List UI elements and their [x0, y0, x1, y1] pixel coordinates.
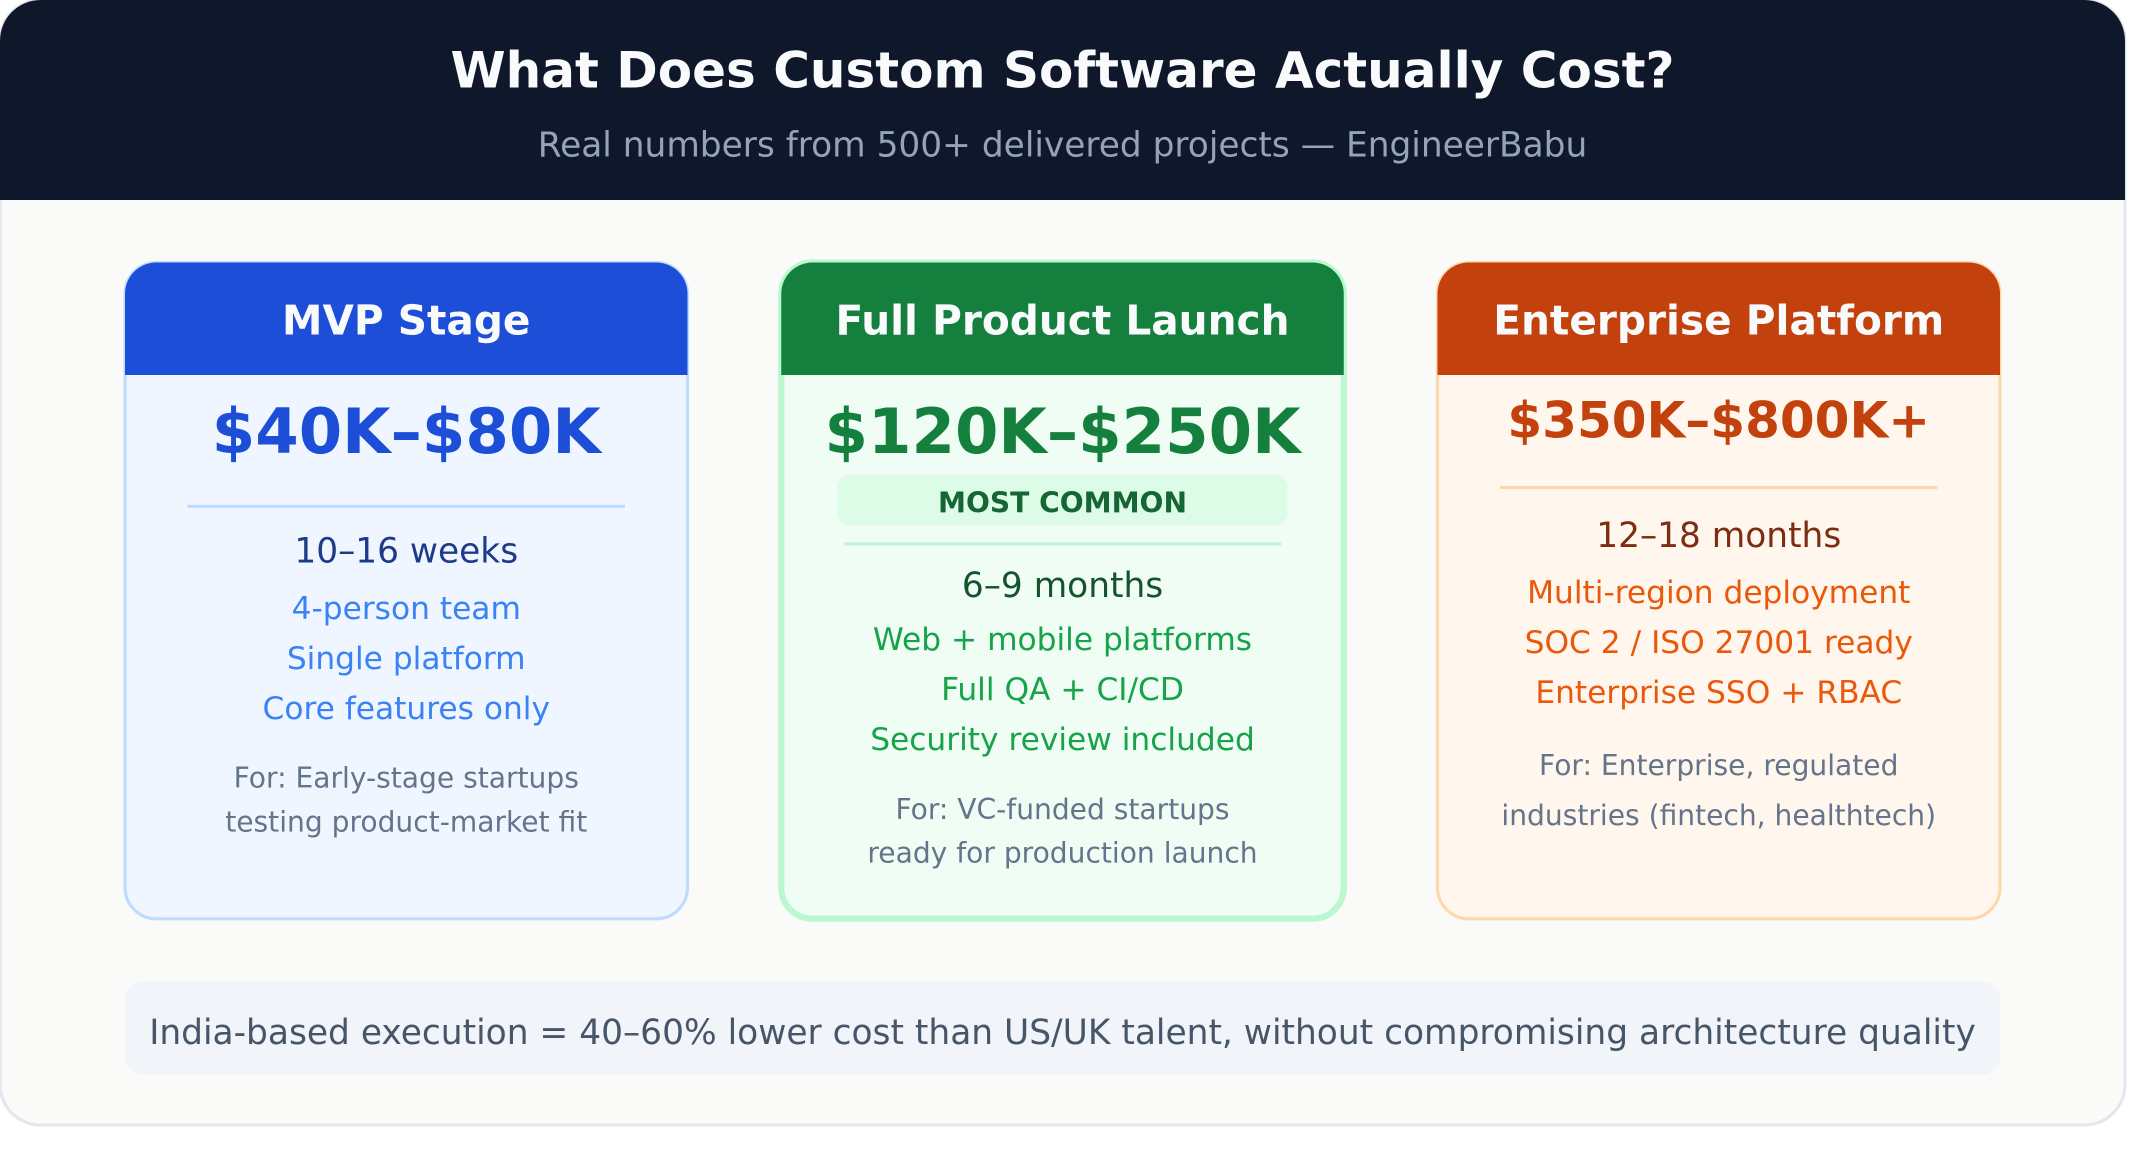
features: enterprise platform	[1525, 575, 1913, 711]
title: What Does Custom Software Actually Cost?	[450, 41, 1675, 99]
features: full product launch	[870, 622, 1255, 758]
audience: MVP stage: For: Early-stage startups	[234, 761, 579, 794]
card header: enterprise platform	[1438, 262, 2000, 375]
footer callout	[125, 981, 2000, 1075]
heading: enterprise platform: Enterprise Platform	[1493, 296, 1944, 344]
features: MVP stage: Single platform	[287, 641, 526, 677]
audience: MVP stage	[225, 761, 587, 838]
features: MVP stage: Core features only	[263, 691, 550, 727]
panel: enterprise platform	[1438, 262, 2000, 919]
card header: MVP stage	[125, 262, 688, 375]
heading: full product launch: Full Product Launch	[836, 296, 1289, 344]
heading: MVP stage: MVP Stage	[282, 296, 530, 344]
timeline: enterprise platform: 12–18 months	[1596, 516, 1841, 556]
header band	[0, 0, 2125, 200]
badge: most common: MOST COMMON	[938, 486, 1187, 519]
features: full product launch: Full QA + CI/CD	[941, 672, 1184, 708]
badge: most common	[838, 475, 1288, 525]
timeline: full product launch: 6–9 months	[962, 566, 1163, 606]
audience: full product launch: For: VC-funded startups	[895, 793, 1230, 826]
price: MVP stage: $40K–$80K	[212, 395, 603, 468]
features: enterprise platform: SOC 2 / ISO 27001 ready	[1525, 625, 1913, 661]
audience: enterprise platform: industries (fintech, healthtech)	[1501, 799, 1936, 832]
audience: full product launch: ready for production launch	[867, 836, 1258, 869]
panel: MVP stage	[125, 262, 688, 919]
subtitle: Real numbers from 500+ delivered projects — EngineerBabu	[538, 125, 1587, 165]
features: full product launch: Web + mobile platforms	[873, 622, 1252, 658]
timeline: MVP stage: 10–16 weeks	[294, 531, 518, 571]
card header: full product launch	[781, 262, 1344, 375]
audience: enterprise platform: For: Enterprise, regulated	[1539, 749, 1898, 782]
panel: full product launch	[781, 262, 1344, 919]
features: enterprise platform: Enterprise SSO + RBAC	[1535, 675, 1902, 711]
features: MVP stage: 4-person team	[292, 591, 521, 627]
price: full product launch: $120K–$250K	[824, 395, 1303, 468]
audience: MVP stage: testing product-market fit	[225, 805, 587, 838]
features: MVP stage	[263, 591, 550, 727]
footer callout: India-based execution = 40–60% lower cost than US/UK talent, without compromising architecture quality	[149, 1013, 1976, 1053]
price: enterprise platform: $350K–$800K+	[1507, 391, 1930, 449]
features: full product launch: Security review included	[870, 722, 1255, 758]
audience: enterprise platform	[1501, 749, 1936, 832]
audience: full product launch	[867, 793, 1258, 869]
features: enterprise platform: Multi-region deployment	[1527, 575, 1910, 611]
